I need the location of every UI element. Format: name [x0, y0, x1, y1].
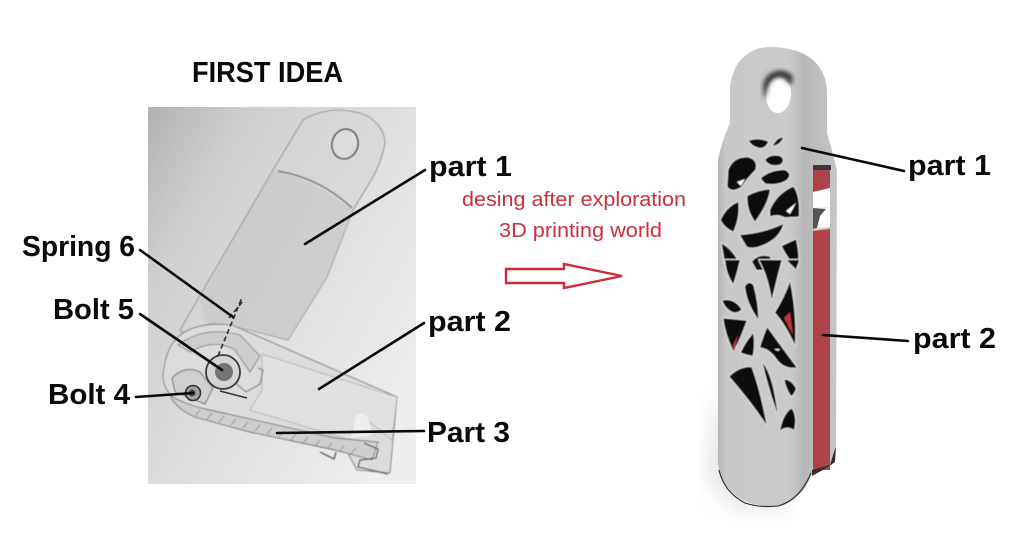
render: red glints in openings	[784, 312, 793, 335]
red caption	[462, 189, 686, 242]
render: eyelet shading	[763, 71, 793, 100]
render: ground shadow	[708, 395, 790, 510]
leader line: bolt 4	[136, 393, 193, 397]
render: voronoi openings	[721, 137, 799, 431]
label: Bolt 4: Bolt 4	[48, 379, 130, 411]
label: Spring 6: Spring 6	[22, 231, 135, 263]
leader line: bolt 5	[140, 314, 222, 370]
sketch: lower part 2 and part 3	[163, 324, 397, 474]
red caption: 3D printing world	[499, 220, 662, 242]
leader line: part 1 (sketch)	[305, 170, 425, 244]
render: body	[718, 47, 837, 507]
sketch: spring 6 dashed	[218, 300, 243, 356]
label: Part 3: Part 3	[427, 417, 510, 449]
label: part 2 render: part 2	[913, 323, 996, 355]
sketch: bolt 4	[186, 386, 200, 400]
leader line: spring 6	[140, 250, 233, 317]
panel: 3D render of keychain part	[708, 47, 837, 510]
panel: pencil sketch	[148, 107, 416, 484]
label: part 1 sketch: part 1	[429, 151, 512, 183]
title: FIRST IDEA	[192, 57, 343, 89]
label: part 1 render: part 1	[908, 150, 991, 182]
leader line: part 2 (sketch)	[319, 323, 424, 389]
sketch: bolt 5	[206, 355, 240, 389]
label: Bolt 5: Bolt 5	[53, 294, 134, 326]
render: red strip	[812, 165, 836, 476]
leader line: part 1 (render)	[802, 148, 904, 171]
leader line: part 2 (render)	[823, 335, 908, 341]
render: outline at base	[719, 470, 811, 507]
label: part 2 sketch: part 2	[428, 306, 511, 338]
leader line: part 3	[277, 431, 424, 433]
red caption: desing after exploration	[462, 189, 686, 211]
arrow: sketch to render	[506, 264, 622, 288]
sketch: upper part 1	[180, 110, 385, 340]
